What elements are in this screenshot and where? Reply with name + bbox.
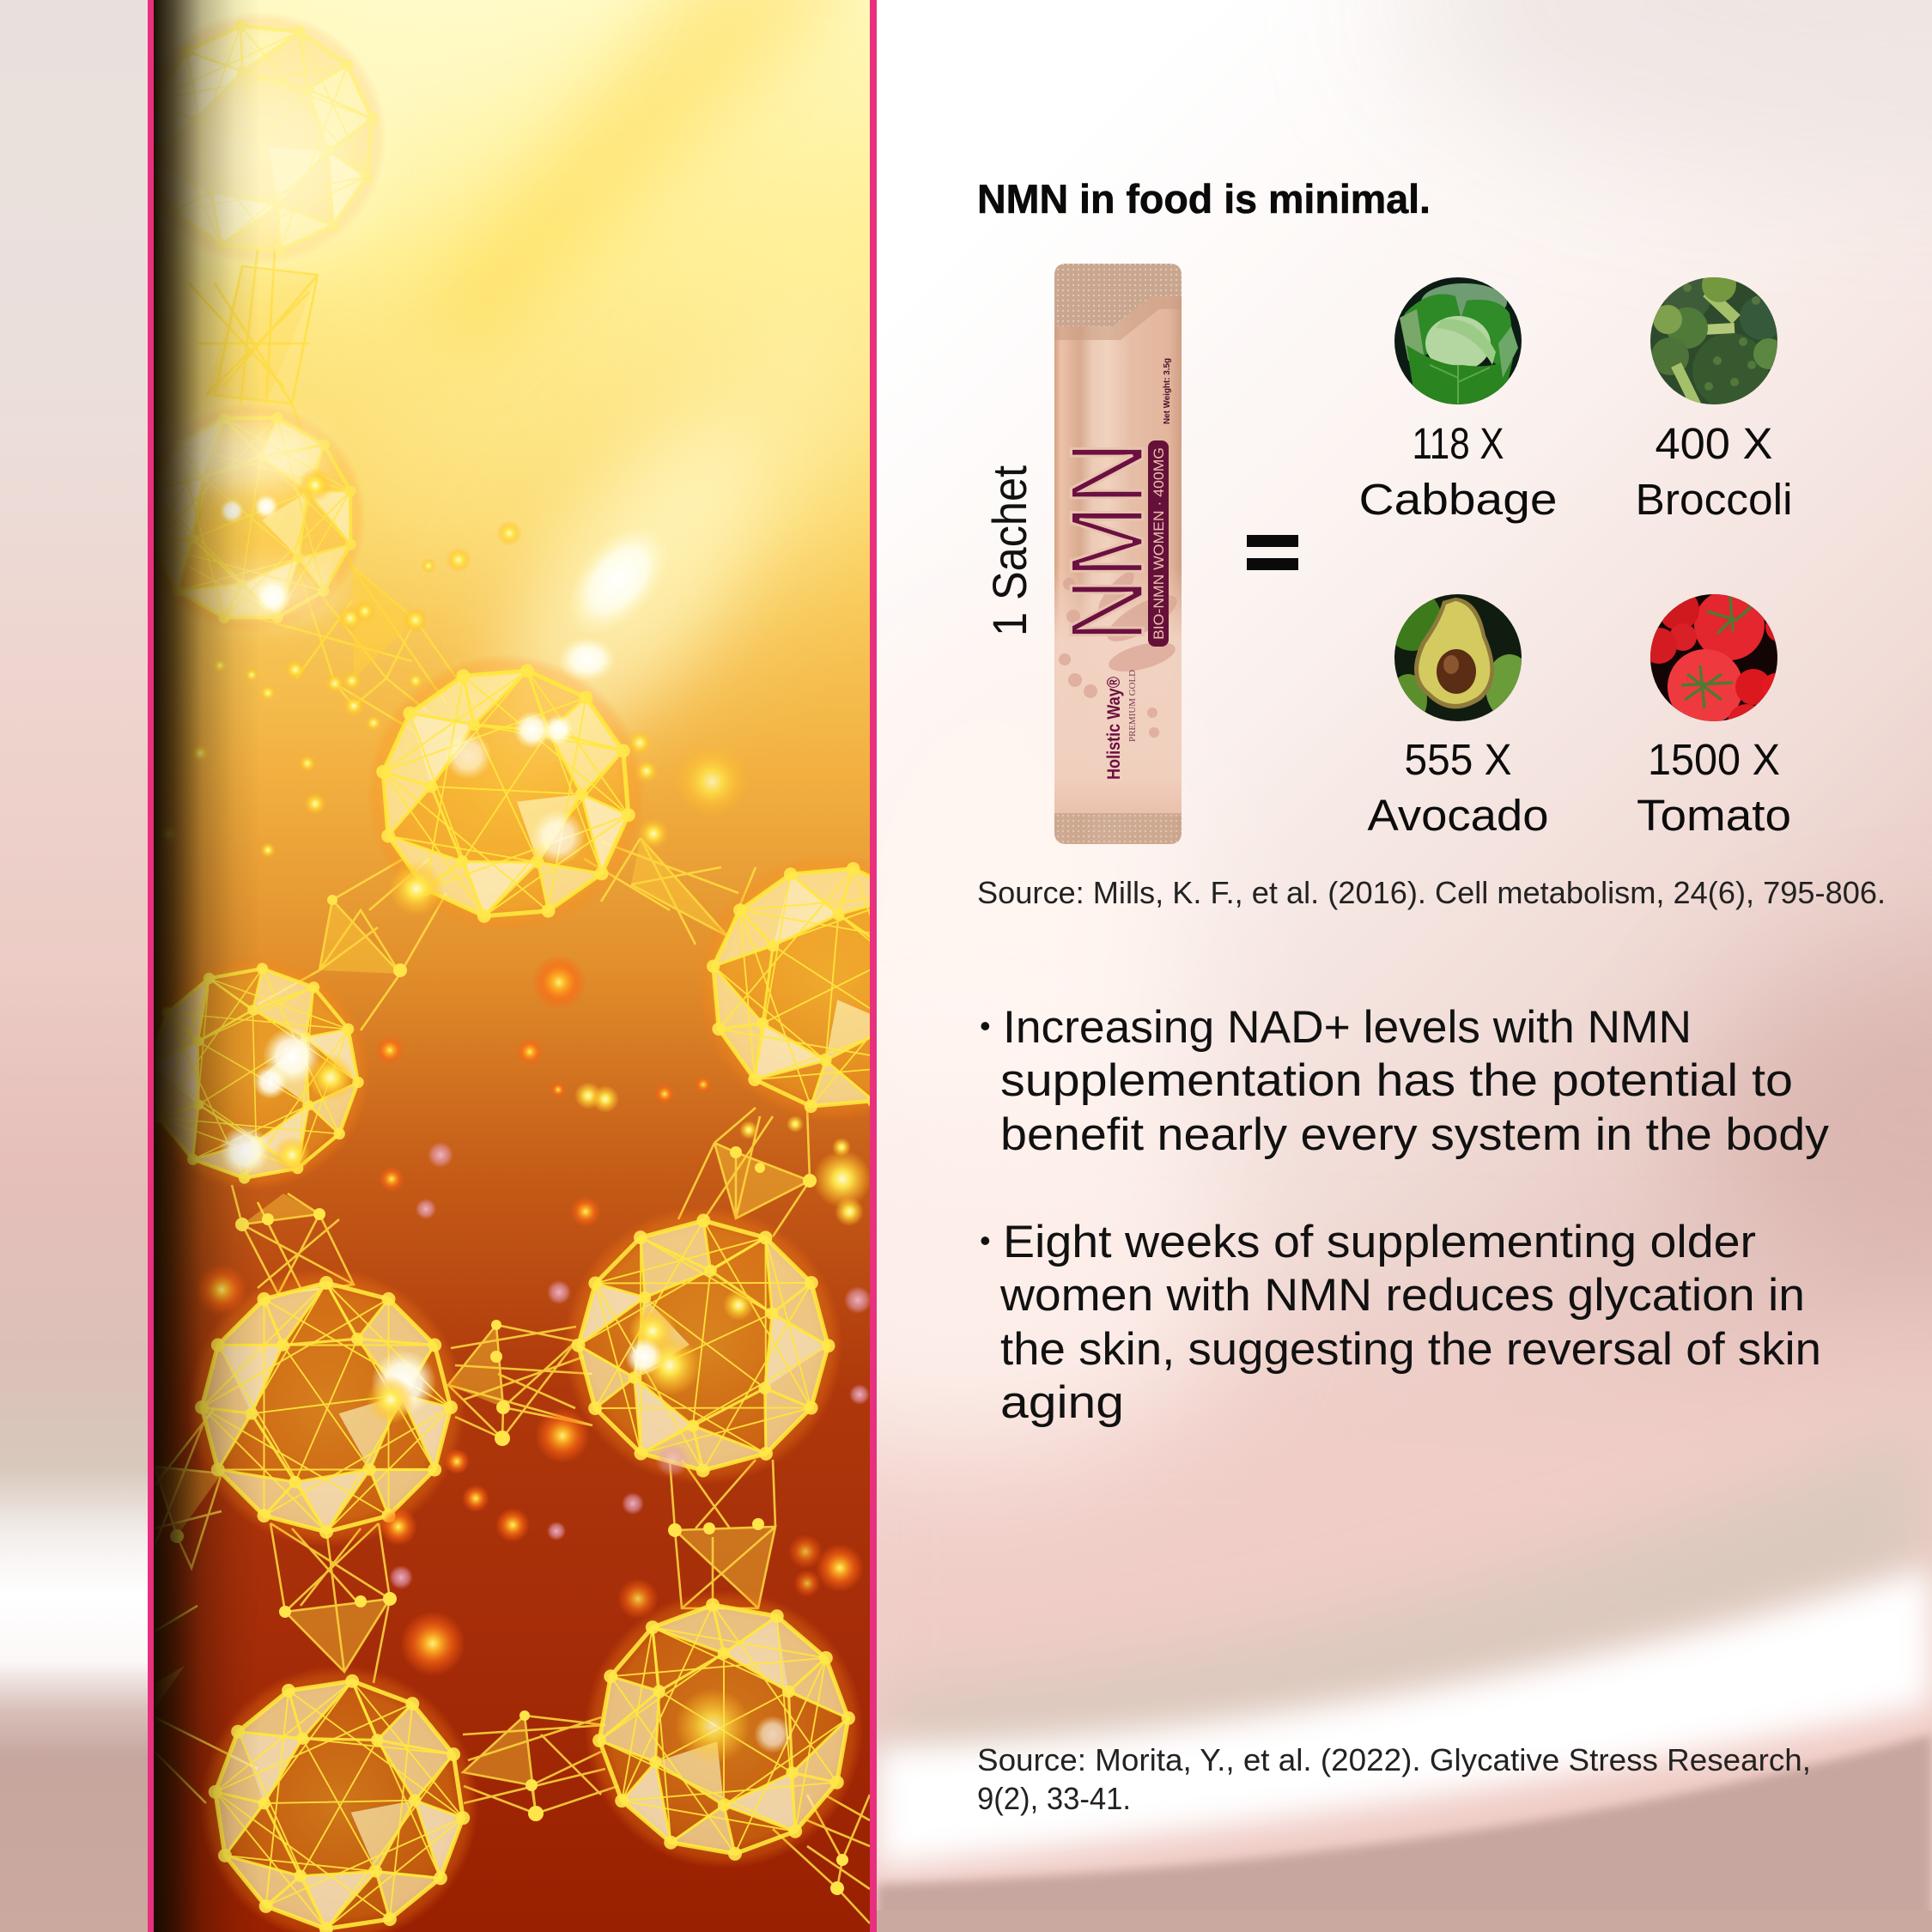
sachet net weight: Net Weight: 3.5g [1163, 358, 1172, 424]
bullet text: glycation [980, 1217, 1821, 1428]
source citation: Mills: Source: Mills, K. F., et al. (2016). Cell metabolism, 24(6), 795-806. [977, 875, 1886, 910]
left dark shadow [154, 0, 261, 1932]
white light flare [547, 506, 690, 682]
glowing particles [159, 468, 872, 1764]
sachet pill label: BIO-NMN WOMEN · 400MG [1151, 447, 1167, 640]
network nodes [170, 895, 848, 1895]
sachet sub-brand: PREMIUM GOLD [1128, 670, 1138, 742]
molecule spheres [97, 0, 1022, 1932]
label: avocado: 555 X [1405, 735, 1511, 784]
label: tomato: 1500 X [1648, 735, 1780, 784]
label: cabbage [1358, 419, 1558, 524]
sachet brand: Holistic Way® [1104, 677, 1124, 780]
panel border: left pink line [148, 0, 154, 1932]
label: cabbage: Cabbage [1358, 475, 1558, 524]
network connections between spheres [155, 249, 870, 1923]
food icon: broccoli [1649, 268, 1784, 409]
light rays [342, 0, 870, 783]
label: broccoli: Broccoli [1635, 475, 1793, 524]
label: 1 Sachet: 1 Sachet [982, 465, 1036, 636]
bullet text: glycation: Eight weeks of supplementing older [1003, 1217, 1756, 1267]
bullet text: glycation: the skin, suggesting the reversal of skin [1000, 1324, 1821, 1375]
panel: golden molecule image [154, 0, 870, 1932]
background: right soft gradient with white swoosh [877, 0, 1932, 1932]
background: left strip [0, 0, 148, 1932]
label: broccoli [1635, 419, 1793, 524]
bullet text: NAD+: • [980, 1008, 991, 1043]
heading: NMN in food is minimal. [977, 176, 1431, 222]
bullet text: glycation: aging [1000, 1377, 1124, 1428]
equals sign [1247, 535, 1298, 570]
sachet leaf decoration [1059, 568, 1183, 738]
source citation: Morita: 9(2), 33-41. [977, 1781, 1131, 1816]
bullet text: NAD+ [980, 1002, 1830, 1160]
panel border: right pink line [870, 0, 877, 1932]
label: avocado [1367, 735, 1549, 840]
bullet text: NAD+: supplementation has the potential to [1000, 1055, 1793, 1106]
network triangles [155, 266, 810, 1785]
bullet text: NAD+: Increasing NAD+ levels with NMN [1003, 1002, 1692, 1053]
food icon: avocado [1383, 589, 1534, 726]
sachet logo NMN: NMN [1048, 441, 1165, 642]
soft white glow on upper spheres [159, 73, 361, 618]
label: avocado: Avocado [1367, 791, 1549, 840]
bullet text: glycation: women with NMN reduces glycation in [999, 1270, 1805, 1321]
label: tomato: Tomato [1637, 791, 1791, 840]
source citation: Morita: Source: Morita, Y., et al. (2022). Glycative Stress Research, [977, 1742, 1811, 1777]
bullet text: glycation: • [980, 1223, 991, 1258]
label: broccoli: 400 X [1656, 419, 1772, 468]
label: tomato [1637, 735, 1791, 840]
food icon: tomato [1641, 589, 1796, 742]
label: cabbage: 118 X [1412, 419, 1504, 468]
bullet text: NAD+: benefit nearly every system in the body [1000, 1109, 1830, 1160]
sachet product pack [1048, 264, 1183, 844]
food icon: cabbage [1391, 275, 1525, 412]
source citation: Morita [977, 1742, 1811, 1816]
sachet bottom seal [1054, 813, 1182, 844]
sachet top seal [1054, 264, 1182, 326]
